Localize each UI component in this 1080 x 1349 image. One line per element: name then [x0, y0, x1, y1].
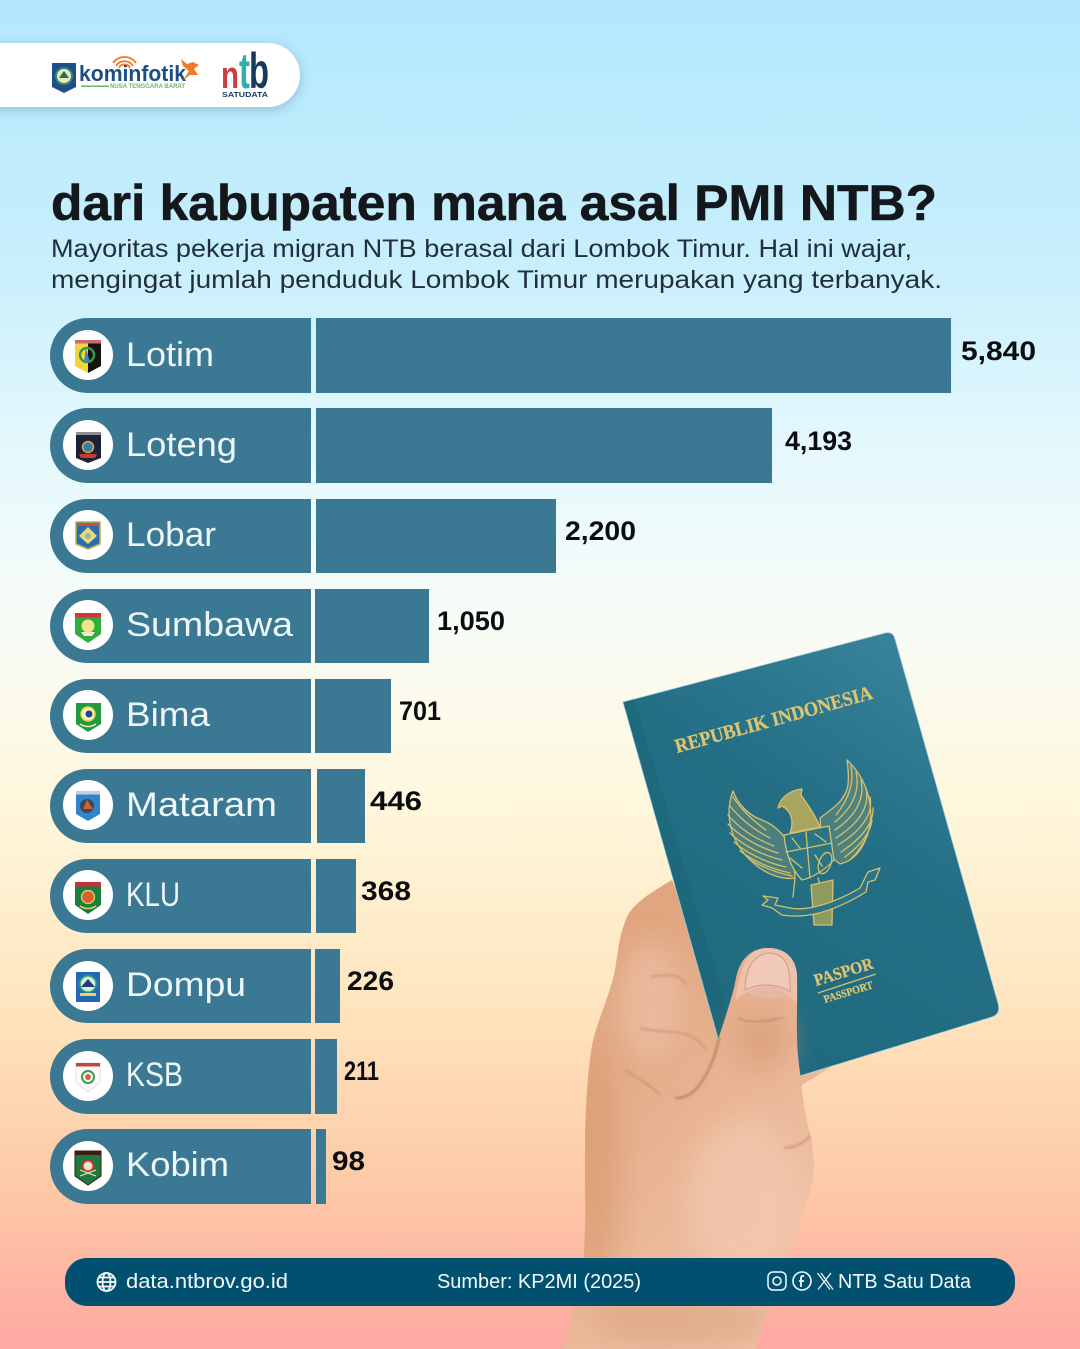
row: Lotim [50, 318, 1036, 393]
row: Kobim: 98 [332, 1146, 365, 1176]
icon: Lotim emblem [75, 340, 101, 373]
row: Lobar [50, 499, 636, 573]
ntb satu data logo: SATUDATA [222, 90, 269, 99]
ntb satu data logo: b [249, 43, 269, 99]
row: Dompu [50, 949, 394, 1023]
icon: Kobim emblem [75, 1151, 101, 1185]
row: KSB: KSB [126, 1056, 183, 1094]
subtitle text block: mengingat jumlah penduduk Lombok Timur merupakan yang terbanyak. [51, 266, 942, 294]
row: Mataram [50, 769, 422, 843]
row: Mataram: Mataram [126, 786, 277, 824]
source text: Sumber: KP2MI (2025) [437, 1271, 641, 1293]
icon: KLU emblem [75, 882, 101, 914]
thumb nail [745, 953, 790, 992]
hand lower shading [590, 1120, 811, 1348]
subtitle text block: Mayoritas pekerja migran NTB berasal dari Lombok Timur. Hal ini wajar, [51, 235, 912, 263]
icon: Lobar emblem [76, 522, 100, 549]
emblem: garuda [728, 760, 880, 925]
passport cover [623, 633, 999, 1098]
bar chart: PMI by regency [50, 318, 1036, 1204]
icon: Sumbawa emblem [75, 613, 101, 643]
row: KSB [50, 1039, 379, 1114]
row: KLU: KLU [126, 876, 180, 914]
icon: globe [98, 1273, 116, 1291]
icon: KSB emblem [76, 1063, 100, 1092]
thumb knuckle creases [738, 1017, 785, 1022]
row: Bima: Bima [126, 696, 210, 734]
row: Loteng: 4,193 [785, 426, 852, 456]
row: KLU [50, 859, 411, 933]
logo pill header [0, 43, 300, 107]
icon: NTB province shield [52, 63, 76, 93]
kominfotik logo: NUSA TENGGARA BARAT [110, 84, 185, 90]
row: KSB: 211 [344, 1056, 379, 1086]
row: Lotim: 5,840 [961, 336, 1036, 366]
hand creases [625, 975, 706, 1095]
row: Loteng: Loteng [126, 426, 237, 464]
illustration: hand holding passport [550, 633, 999, 1349]
row: Loteng [50, 408, 852, 483]
row: Dompu: Dompu [126, 966, 246, 1004]
row: Lotim: Lotim [126, 336, 214, 374]
row: Dompu: 226 [347, 966, 394, 996]
passport label text [812, 954, 876, 1006]
row: Lobar: 2,200 [565, 516, 636, 546]
title: dari kabupaten mana asal PMI NTB? [51, 175, 937, 231]
row: Sumbawa [50, 589, 505, 663]
website text: data.ntbrov.go.id [126, 1271, 288, 1293]
icon: Mataram emblem [76, 791, 100, 821]
icon: Bima emblem [76, 703, 101, 732]
icon: x [818, 1273, 833, 1290]
icon: Dompu emblem [76, 972, 100, 1002]
row: Sumbawa: 1,050 [437, 606, 505, 636]
passport label text: PASSPORT [822, 979, 875, 1006]
thumb [660, 948, 810, 1250]
footer bar [65, 1258, 1015, 1306]
icon: instagram [768, 1272, 786, 1290]
row: KLU: 368 [361, 876, 411, 906]
ntb satu data logo: t [239, 43, 250, 99]
row: Lobar: Lobar [126, 516, 216, 554]
row: Bima [50, 679, 441, 753]
icon: facebook [793, 1272, 811, 1290]
ntb satu data logo: n [221, 55, 239, 97]
passport label text: PASPOR [812, 954, 876, 990]
row: Kobim: Kobim [126, 1146, 229, 1184]
subtitle text block [51, 235, 942, 294]
row: Bima: 701 [399, 696, 441, 726]
ntb satu data logo [221, 43, 269, 99]
social handle text: NTB Satu Data [838, 1271, 972, 1293]
kominfotik logo: kominfotik [79, 61, 187, 86]
row: Mataram: 446 [370, 786, 422, 816]
passport heading text: REPUBLIK INDONESIA [672, 682, 875, 758]
row: Kobim [50, 1129, 365, 1204]
row: Sumbawa: Sumbawa [126, 606, 293, 644]
crease between finger and thumb [675, 1038, 719, 1098]
hand palm and fingers [562, 880, 830, 1349]
icon: Loteng emblem [76, 432, 101, 463]
